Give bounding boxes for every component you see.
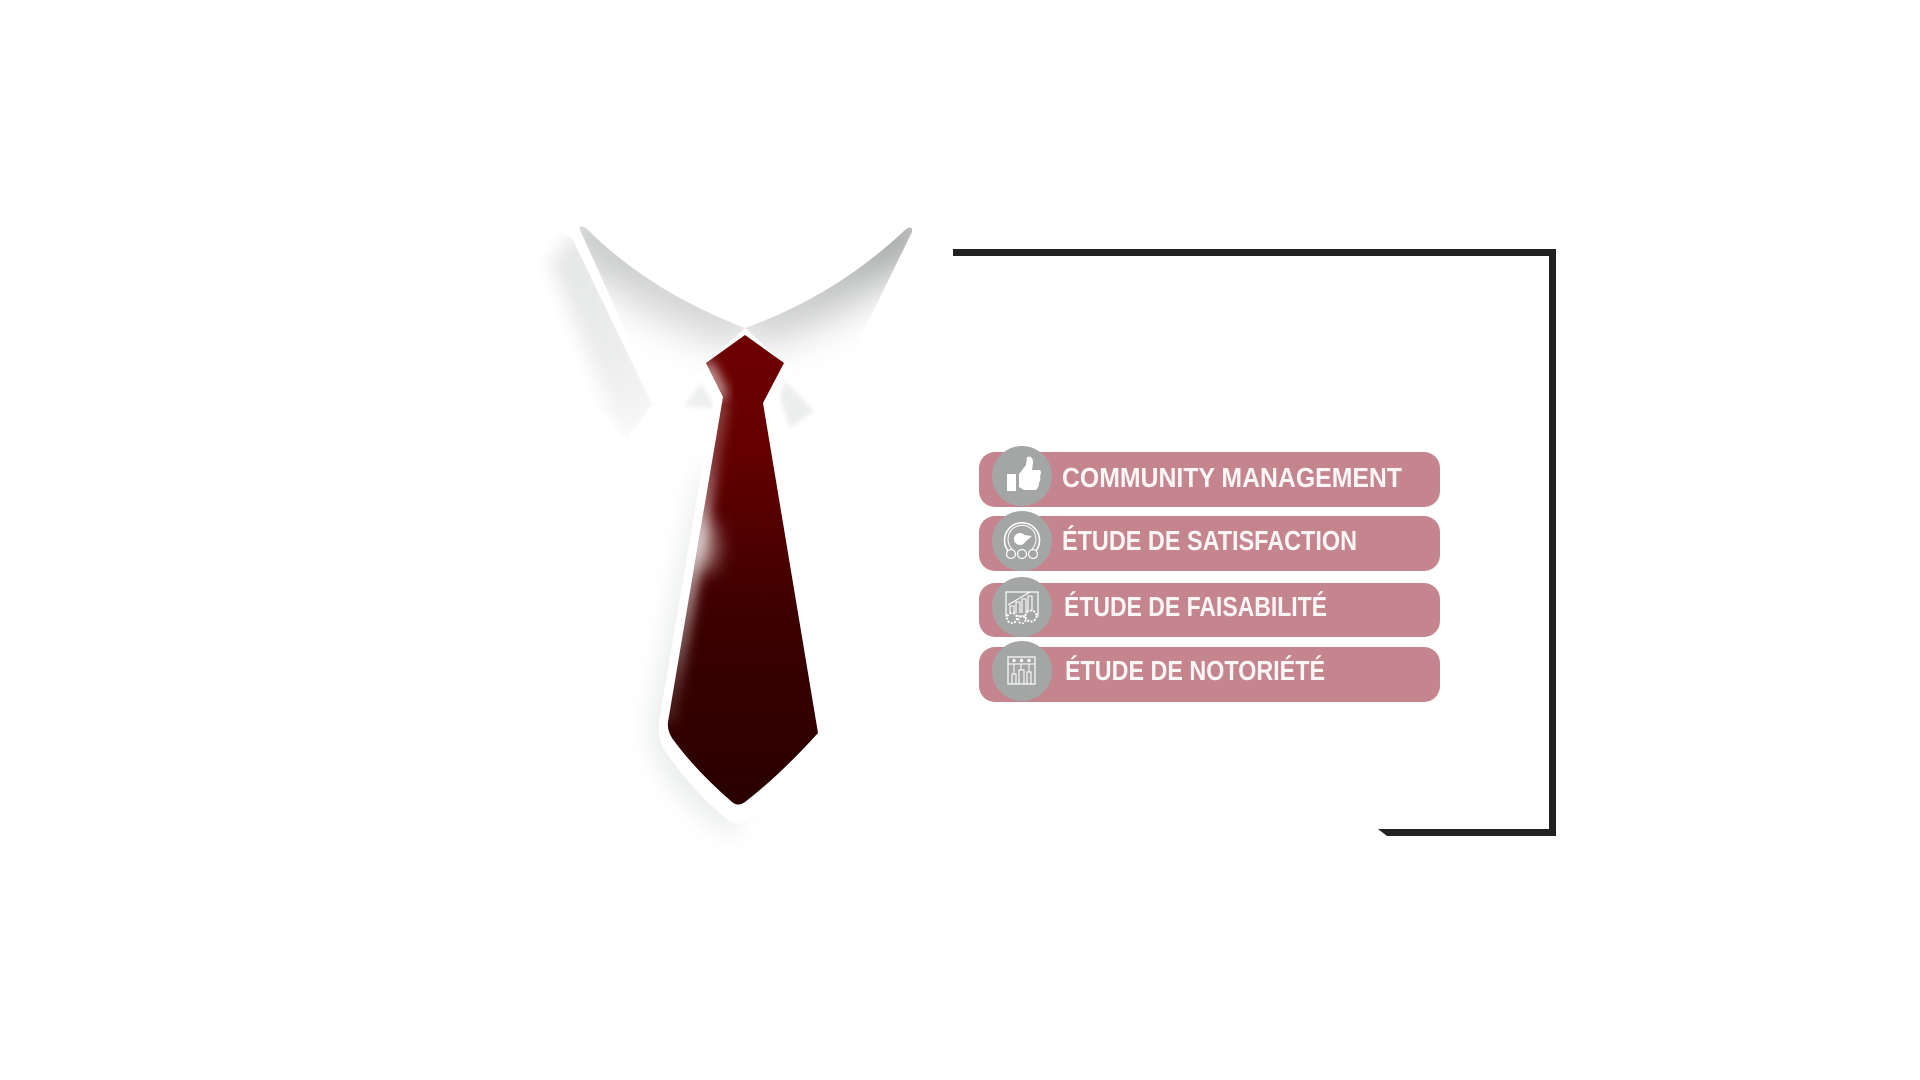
label: ÉTUDE DE NOTORIÉTÉ <box>1065 655 1325 686</box>
icon circle: ratings chart <box>992 641 1052 701</box>
item: étude de notoriété <box>979 641 1440 702</box>
label: COMMUNITY MANAGEMENT <box>1062 462 1402 493</box>
bar <box>979 452 1440 507</box>
icon circle: satisfaction gauge <box>992 511 1052 571</box>
collar inner shade left <box>684 383 714 408</box>
tie <box>648 335 830 838</box>
tie body <box>668 335 818 804</box>
item: community management <box>979 446 1440 507</box>
bracket frame <box>953 249 1556 836</box>
collar left side shadow <box>550 236 652 422</box>
bar <box>979 516 1440 571</box>
label: ÉTUDE DE SATISFACTION <box>1062 525 1357 556</box>
item: étude de faisabilité <box>979 577 1440 637</box>
infographic canvas <box>550 226 1556 836</box>
bar <box>979 583 1440 637</box>
collar inner shade right <box>780 381 814 428</box>
collar right flap <box>745 227 912 358</box>
tie white outline <box>658 380 830 824</box>
item: étude de satisfaction <box>979 511 1440 571</box>
tie drop shadow <box>648 460 745 838</box>
label: ÉTUDE DE FAISABILITÉ <box>1064 591 1327 622</box>
collar left flap <box>580 226 745 358</box>
icon circle: thumbs up <box>992 446 1052 506</box>
tie gloss <box>668 363 723 722</box>
bar <box>979 647 1440 702</box>
icon circle: chart and gears <box>992 577 1052 637</box>
collar <box>550 226 912 426</box>
